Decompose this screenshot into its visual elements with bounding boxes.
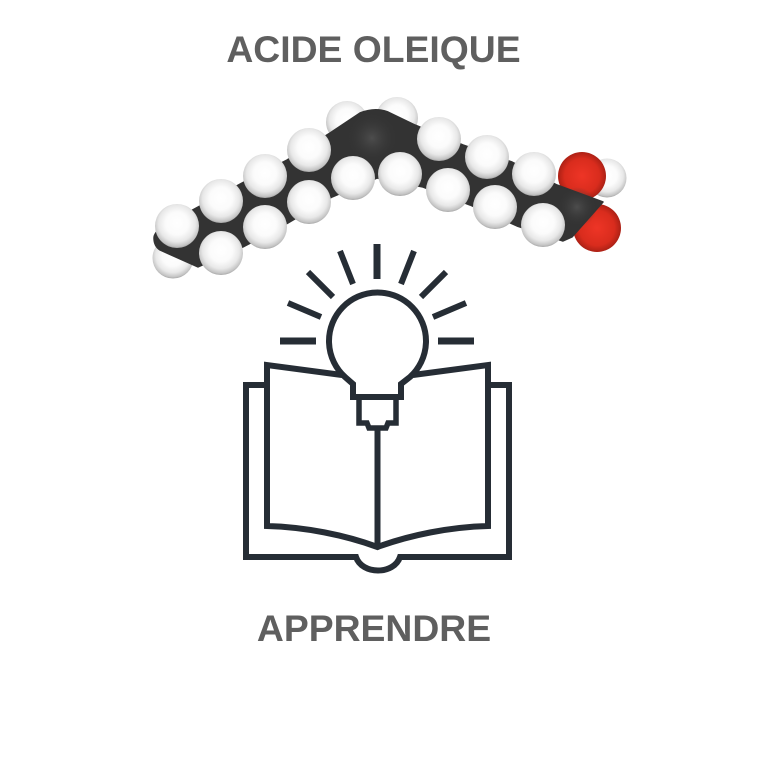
book inner pages xyxy=(267,365,488,547)
carbon chain xyxy=(154,110,603,267)
book spine xyxy=(374,428,380,547)
front hydrogen atoms xyxy=(155,117,565,275)
icon: light bulb over open book xyxy=(246,244,509,570)
light rays xyxy=(280,244,474,341)
label: APPRENDRE xyxy=(257,607,491,649)
title: ACIDE OLEIQUE xyxy=(226,28,521,70)
oxygen atoms xyxy=(558,152,621,252)
bulb xyxy=(329,292,426,397)
molecule: oleic acid xyxy=(152,97,626,278)
book cover xyxy=(246,385,509,570)
back hydrogen atoms xyxy=(152,97,626,278)
bulb base xyxy=(359,398,396,428)
